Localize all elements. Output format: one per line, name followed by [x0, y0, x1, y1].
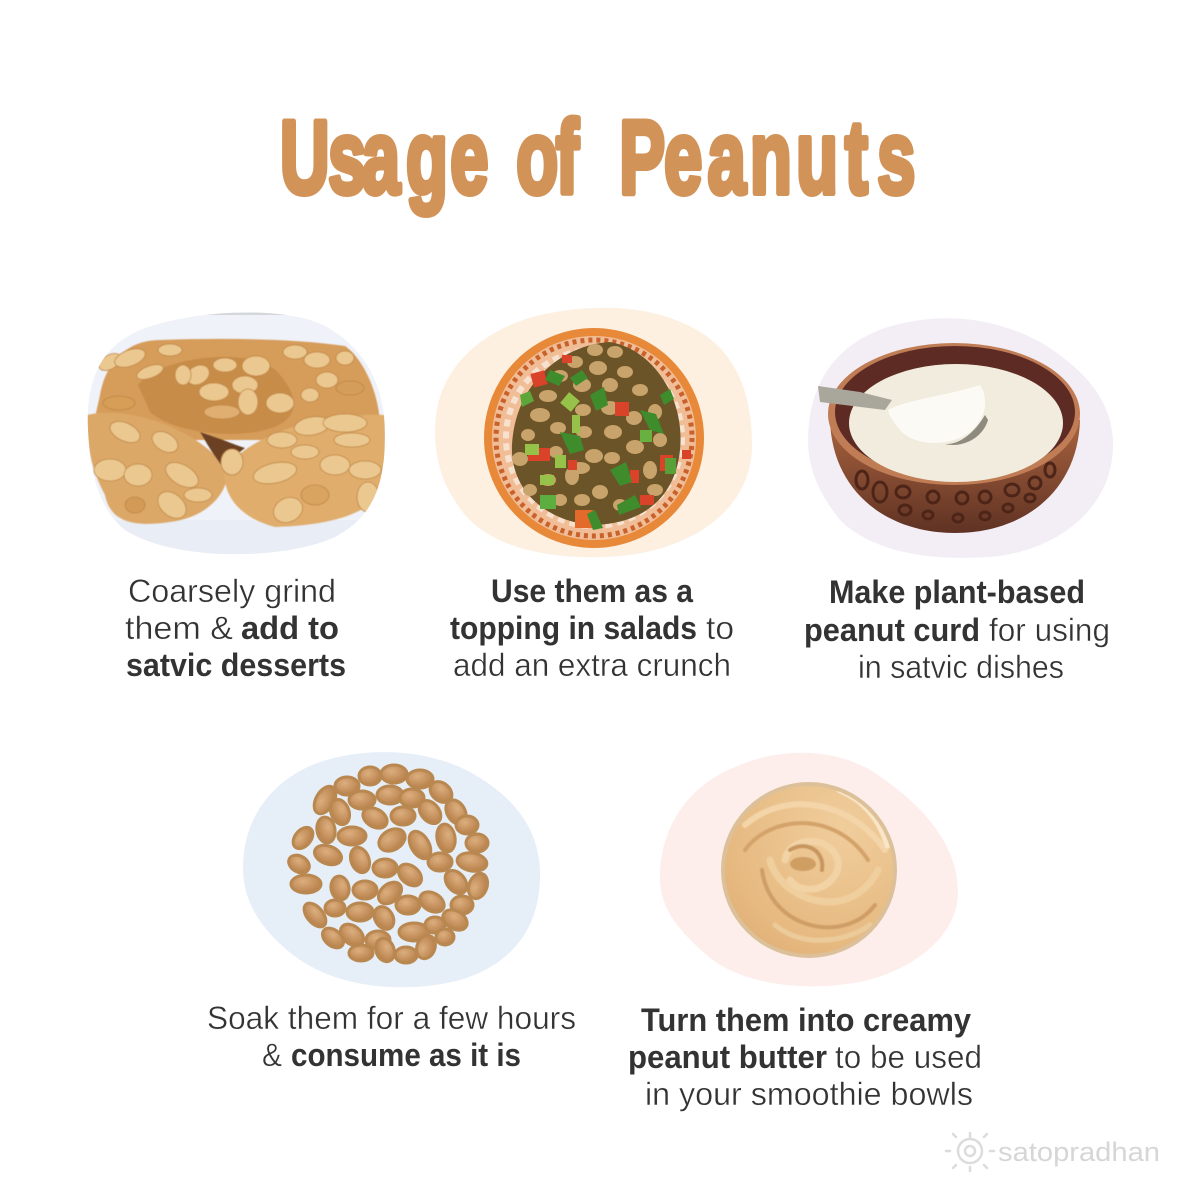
text: curd caption: in satvic dishes — [858, 649, 1064, 685]
text: salad caption: topping in salads — [450, 610, 697, 646]
text: desserts caption: add to — [241, 610, 339, 646]
text: soak caption: & — [262, 1037, 282, 1073]
text: curd caption: Make plant-based — [829, 574, 1085, 610]
watermark logo — [946, 1133, 1160, 1171]
text: desserts caption: them & — [125, 610, 233, 646]
icon: peanut pile — [285, 765, 491, 964]
text: soak caption: Soak them for a few hours — [207, 1000, 576, 1036]
text: salad caption: add an extra crunch — [453, 647, 731, 683]
panel: salad — [435, 308, 752, 683]
blob: pink background — [660, 753, 958, 986]
panel: desserts — [85, 305, 387, 683]
text: butter caption: peanut butter — [628, 1039, 827, 1075]
text: curd caption: for using — [989, 612, 1110, 648]
blob: cream background — [435, 308, 752, 557]
text: butter caption: to be used — [835, 1039, 982, 1075]
text: desserts caption: Coarsely grind — [128, 573, 336, 609]
text: salad caption: to — [706, 610, 734, 646]
panel: peanut curd — [804, 318, 1113, 685]
icon: peanut butter jar — [721, 782, 897, 958]
text: desserts caption: satvic desserts — [126, 647, 346, 683]
icon: curd bowl — [818, 343, 1080, 533]
text: salad caption: Use them as a — [491, 573, 693, 609]
text: satopradhan: satopradhan — [998, 1137, 1160, 1167]
icon: sun logo — [946, 1133, 994, 1171]
icon: peanut cookies — [85, 305, 387, 562]
title: Usage of Peanuts — [280, 99, 915, 215]
text: soak caption: consume as it is — [291, 1037, 521, 1073]
text: butter caption: in your smoothie bowls — [645, 1076, 973, 1112]
text: curd caption: peanut curd — [804, 612, 980, 648]
blob: blue background — [243, 752, 540, 987]
panel: peanut butter — [628, 753, 982, 1112]
blob: lilac background — [808, 318, 1113, 558]
panel: soaked peanuts — [207, 752, 576, 1073]
text: butter caption: Turn them into creamy — [641, 1002, 971, 1038]
icon: salad plate — [484, 328, 704, 548]
